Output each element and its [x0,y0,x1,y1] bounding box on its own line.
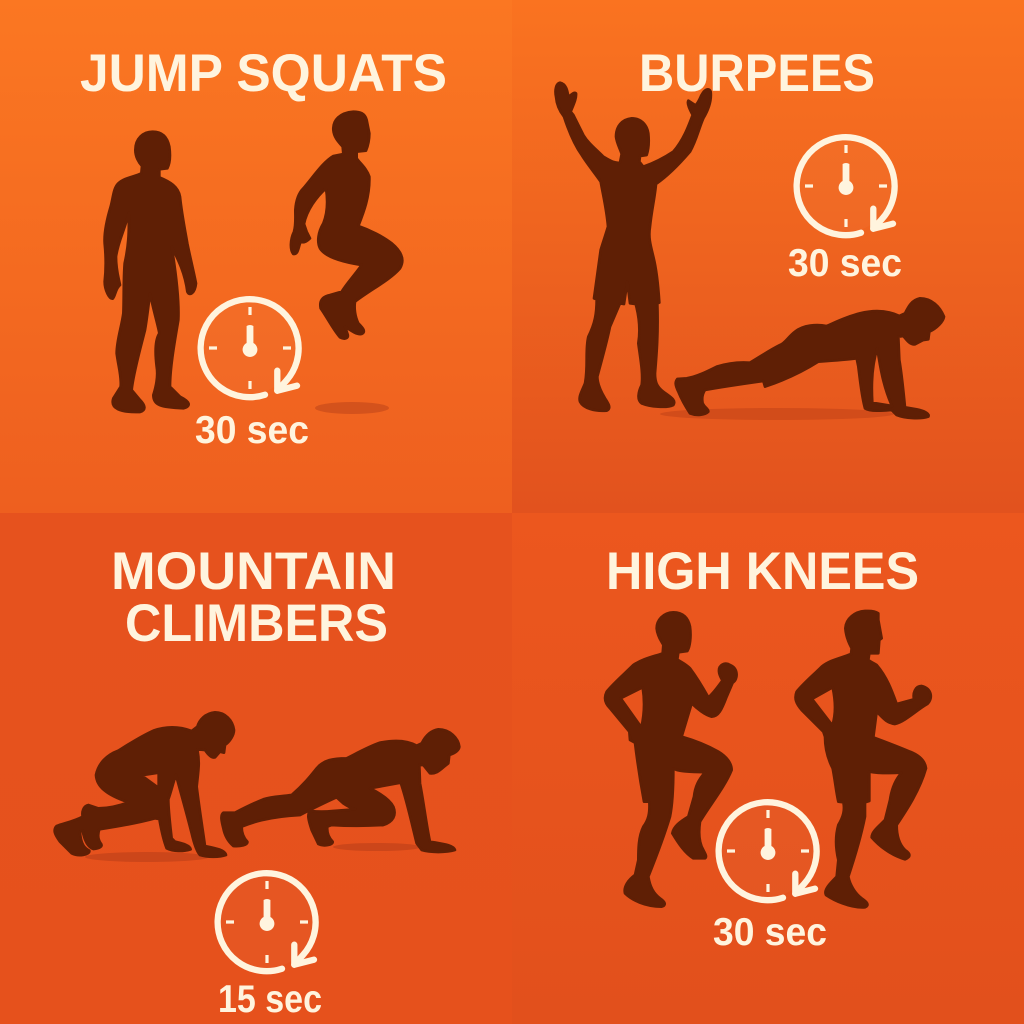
panel: high knees [512,513,1024,1024]
timer label: 30 sec [713,911,827,954]
panel: mountain climbers [0,513,512,1024]
panel: jump squats [0,0,512,513]
icon: 30 second timer [201,299,299,397]
figure: climber, knee forward [55,712,234,857]
icon: 15 second timer [218,873,316,971]
heading: mountain climbers: MOUNTAIN [111,542,396,601]
figure: arms raised [555,83,711,411]
heading: high knees: HIGH KNEES [606,542,919,601]
ground shadows [85,843,421,862]
figure: runner right [795,611,931,907]
timer label: 30 sec [788,242,902,285]
heading: burpees: BURPEES [639,44,875,103]
ground shadow [660,408,894,420]
heading: jump squats: JUMP SQUATS [80,44,447,103]
timer label: 15 sec [218,978,322,1021]
figure: climber, leg extended [221,729,459,852]
figure: jumping [291,112,402,339]
timer label: 30 sec [195,409,309,452]
heading: mountain climbers [111,542,396,653]
ground shadow [315,402,389,414]
figure: plank [676,298,944,418]
figure: runner left [605,612,737,907]
panel: burpees [512,0,1024,513]
heading: mountain climbers: CLIMBERS [125,594,388,653]
icon: 30 second timer [719,802,817,900]
icon: 30 second timer [797,137,895,235]
figure: standing [105,132,196,412]
